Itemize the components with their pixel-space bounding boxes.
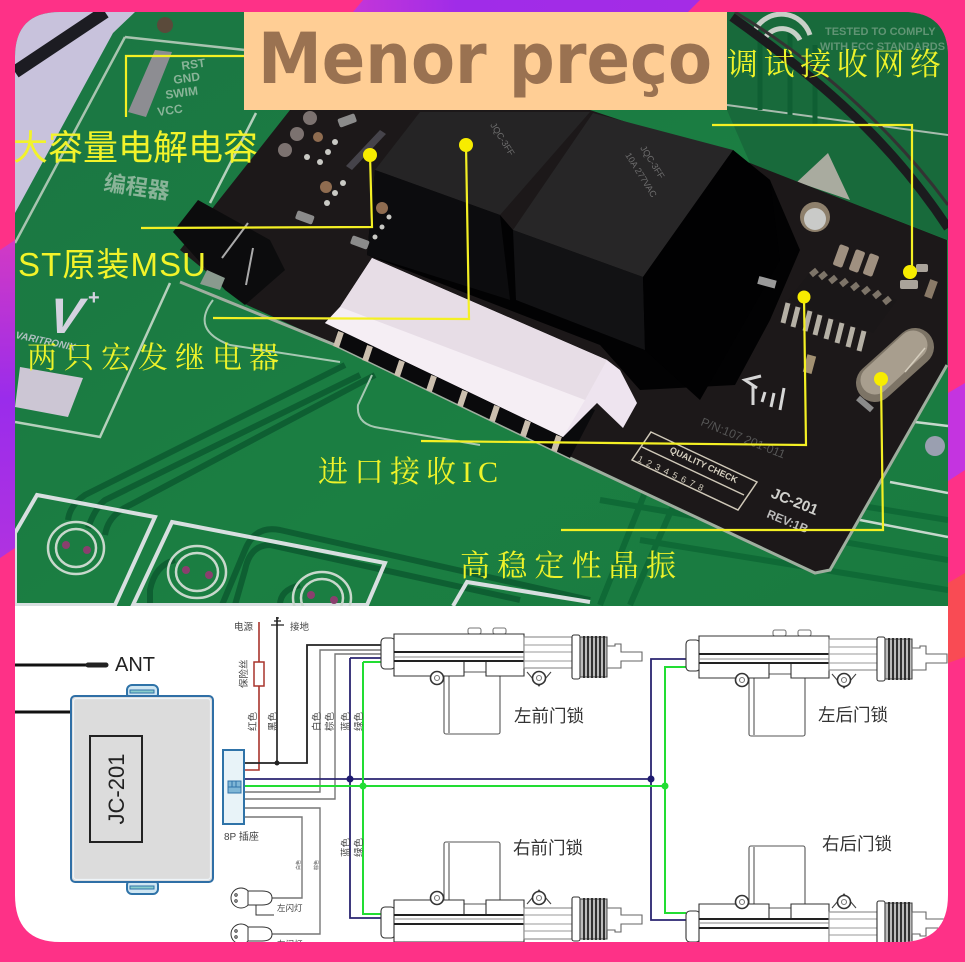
callout label: relays: 两只宏发继电器 bbox=[27, 342, 279, 375]
lock label: right rear: 右后门锁 bbox=[822, 834, 892, 854]
photo: circuit board: + bbox=[88, 287, 100, 309]
right side white lines bbox=[860, 422, 948, 537]
board silk text: VCC bbox=[156, 102, 184, 119]
antenna lead: ANT bbox=[115, 654, 155, 676]
callout label: receiver IC: 进口接收IC bbox=[318, 456, 498, 489]
wiring bbox=[244, 617, 686, 934]
board silk text: 编程器 bbox=[102, 170, 171, 204]
callout lines and dots bbox=[126, 56, 917, 530]
pad squares bbox=[15, 495, 155, 605]
silk outlines bbox=[15, 113, 256, 437]
quality check box: 12345678 bbox=[636, 454, 709, 495]
wire labels: 绿色 bbox=[353, 837, 365, 857]
board model marks: P/N:107 201-011 bbox=[699, 415, 788, 462]
wire labels: 电源 bbox=[234, 621, 254, 633]
wire labels: 黑色 bbox=[267, 711, 279, 731]
board model marks: JC-201 bbox=[769, 485, 820, 519]
door lock: right front bbox=[381, 842, 642, 948]
pin strip bbox=[336, 329, 595, 458]
board silk text: GND bbox=[172, 69, 201, 87]
dark mass under relays bbox=[367, 150, 800, 390]
board silk text: RST bbox=[180, 56, 207, 73]
wire labels: 蓝色 bbox=[340, 837, 352, 857]
black board bbox=[180, 110, 947, 573]
USB connector bbox=[173, 200, 285, 305]
door lock: right rear bbox=[686, 846, 947, 952]
right indicator bulb bbox=[231, 924, 272, 944]
white connector bbox=[325, 258, 637, 437]
wire labels: 白色 bbox=[295, 860, 302, 870]
lock label: right front: 右前门锁 bbox=[513, 838, 583, 858]
photo: circuit board: JQC-3FF bbox=[638, 144, 667, 181]
antenna icon bbox=[745, 376, 784, 410]
door lock: left rear bbox=[686, 630, 947, 736]
board model marks bbox=[699, 415, 820, 536]
SMD parts left bbox=[278, 111, 392, 250]
relay 1 bbox=[375, 112, 590, 215]
banner: Menor preço bbox=[258, 18, 712, 100]
programmer pads bbox=[128, 50, 172, 117]
relay 2 bbox=[513, 113, 733, 277]
wire labels: 保险丝 bbox=[238, 659, 250, 688]
photo: circuit board: 10A 277VAC bbox=[623, 151, 659, 200]
callout label: capacitor: 大容量电解电容 bbox=[13, 129, 258, 168]
ground symbol bbox=[271, 618, 284, 625]
photo: circuit board: WITH FCC STANDARDS bbox=[820, 41, 945, 53]
photo: circuit board bbox=[14, 12, 948, 624]
wire labels: 棕色 bbox=[324, 711, 336, 731]
control module JC-201: JC-201 bbox=[104, 754, 129, 824]
traces bbox=[68, 365, 375, 535]
board silk text bbox=[102, 56, 207, 204]
IC bbox=[788, 270, 897, 333]
lavender tabletop bbox=[15, 12, 135, 213]
8P connector bbox=[223, 750, 244, 824]
lock label: left front: 左前门锁 bbox=[514, 706, 584, 726]
board silk text: SWIM bbox=[164, 84, 199, 102]
wire labels: 白色 bbox=[311, 711, 323, 731]
wire labels: 棕色 bbox=[313, 860, 320, 870]
crystal bbox=[858, 345, 925, 410]
mounting hole bbox=[800, 202, 830, 232]
wire labels: 接地 bbox=[290, 621, 310, 633]
left indicator bulb bbox=[231, 888, 274, 915]
quality check box bbox=[632, 432, 757, 510]
wire labels: 左闪灯 bbox=[277, 939, 303, 949]
wire labels: 蓝色 bbox=[340, 711, 352, 731]
callout label: tuning network: 调试接收网络 bbox=[727, 47, 941, 82]
callout label: crystal: 高稳定性晶振 bbox=[460, 550, 676, 583]
panel: wiring diagram bbox=[15, 606, 948, 952]
quality check box: QUALITY CHECK bbox=[668, 445, 740, 485]
wire labels: 左闪灯 bbox=[277, 903, 303, 913]
lock label: left rear: 左后门锁 bbox=[818, 705, 888, 725]
wire labels bbox=[224, 621, 365, 949]
wire labels: 8P 插座 bbox=[224, 830, 259, 843]
photo: circuit board: TESTED TO COMPLY bbox=[825, 26, 936, 38]
photo: circuit board: VARITRONIX bbox=[14, 330, 78, 354]
door lock: left front bbox=[381, 628, 642, 734]
wire labels: 绿色 bbox=[353, 711, 365, 731]
photo: circuit board: V bbox=[41, 288, 92, 344]
board model marks: REV:1B bbox=[765, 507, 811, 536]
control module JC-201 bbox=[71, 685, 213, 894]
top-right board bbox=[727, 12, 948, 240]
fuse bbox=[254, 662, 264, 686]
wire labels: 红色 bbox=[247, 711, 259, 731]
SMD right bbox=[757, 244, 938, 374]
antenna lead bbox=[15, 657, 154, 671]
photo: circuit board: JQC-3FF bbox=[488, 121, 517, 158]
callout label: MCU: ST原装MSU bbox=[18, 246, 206, 283]
